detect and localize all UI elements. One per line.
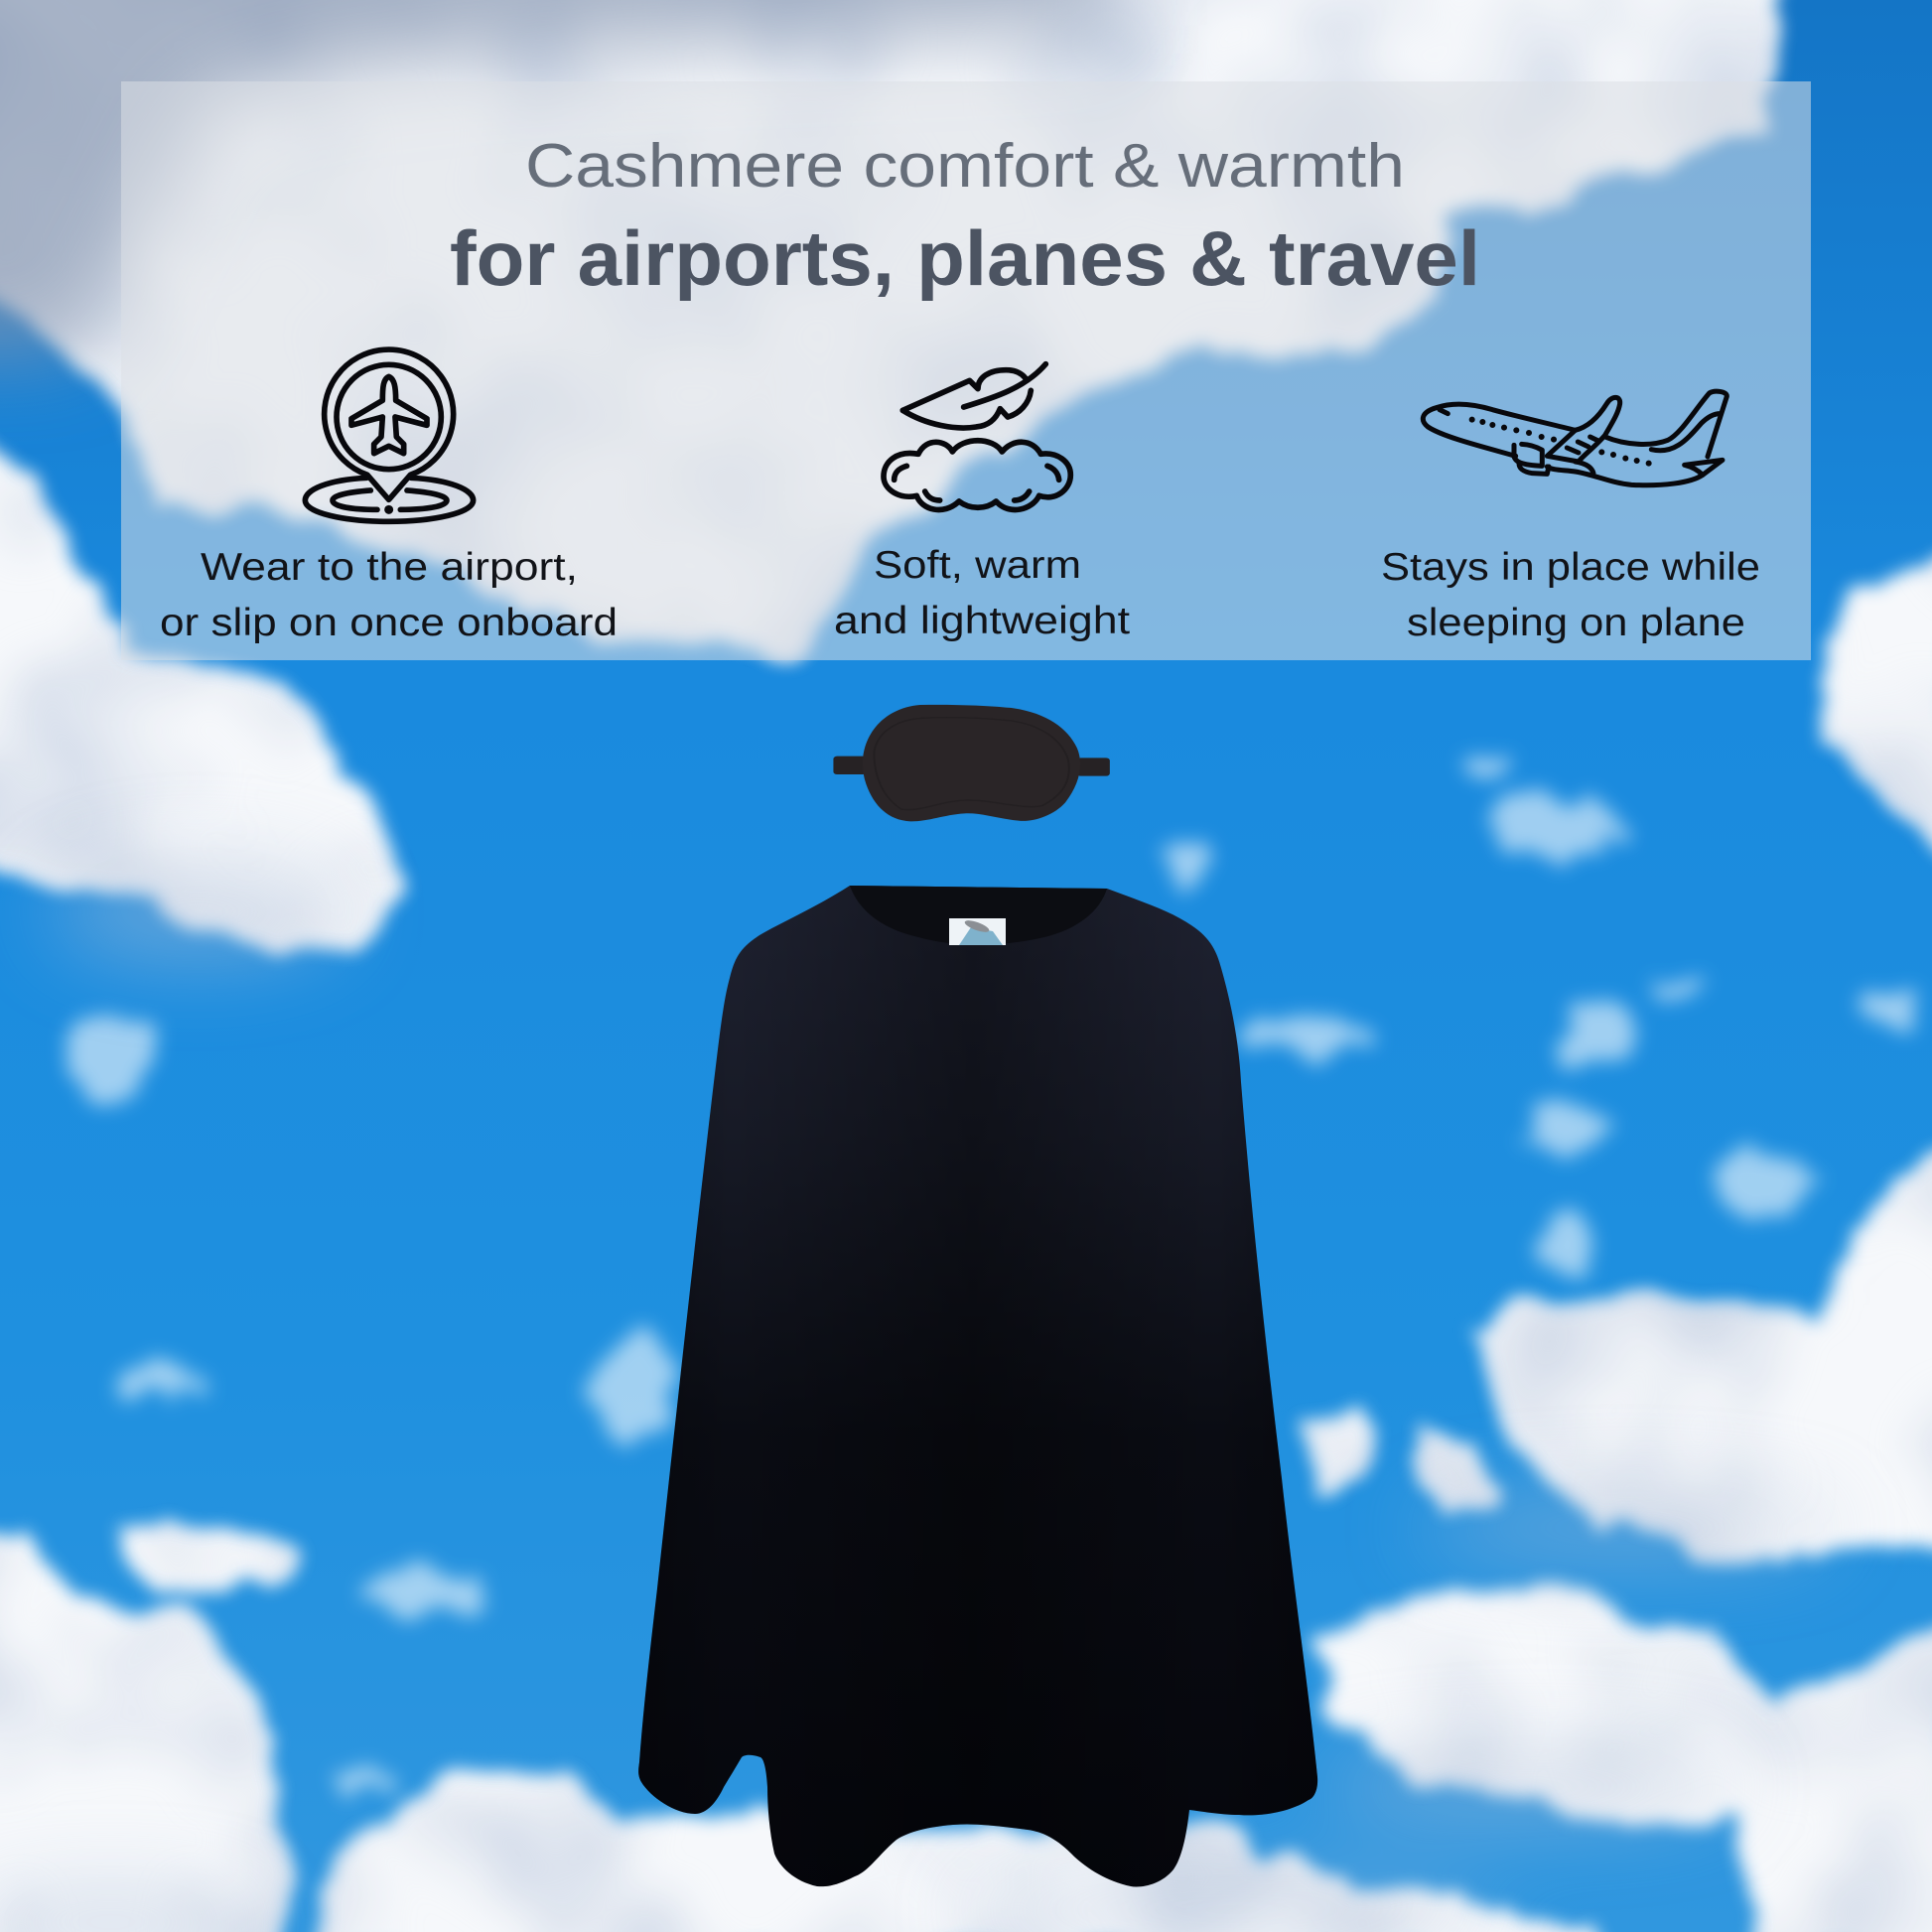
eye mask	[833, 705, 1110, 821]
text: airport label	[160, 546, 618, 644]
heading: line one: Cashmere comfort & warmth	[525, 132, 1405, 201]
neckline	[850, 886, 1107, 945]
icon: feather and cloud	[884, 364, 1070, 510]
cloud shading	[0, 863, 1836, 1932]
garment label	[949, 918, 1006, 945]
heading: line two: for airports, planes & travel	[450, 214, 1480, 302]
text: airport label: Wear to the airport,	[201, 546, 578, 589]
panel: translucent header	[121, 81, 1811, 660]
grey haze at upper left	[0, 0, 1109, 357]
text: stay-in-place label	[1381, 546, 1760, 644]
text: stay-in-place label: Stays in place while	[1381, 546, 1760, 589]
text: softness label: and lightweight	[834, 600, 1130, 642]
text: softness label: Soft, warm	[874, 544, 1081, 587]
icon: airplane	[1423, 391, 1726, 485]
text: airport label: or slip on once onboard	[160, 602, 618, 644]
poncho garment	[638, 886, 1318, 1886]
text: stay-in-place label: sleeping on plane	[1407, 602, 1745, 644]
icon: airport location pin	[305, 349, 474, 521]
small wispy clouds	[67, 750, 1918, 1795]
text: softness label	[834, 544, 1130, 642]
